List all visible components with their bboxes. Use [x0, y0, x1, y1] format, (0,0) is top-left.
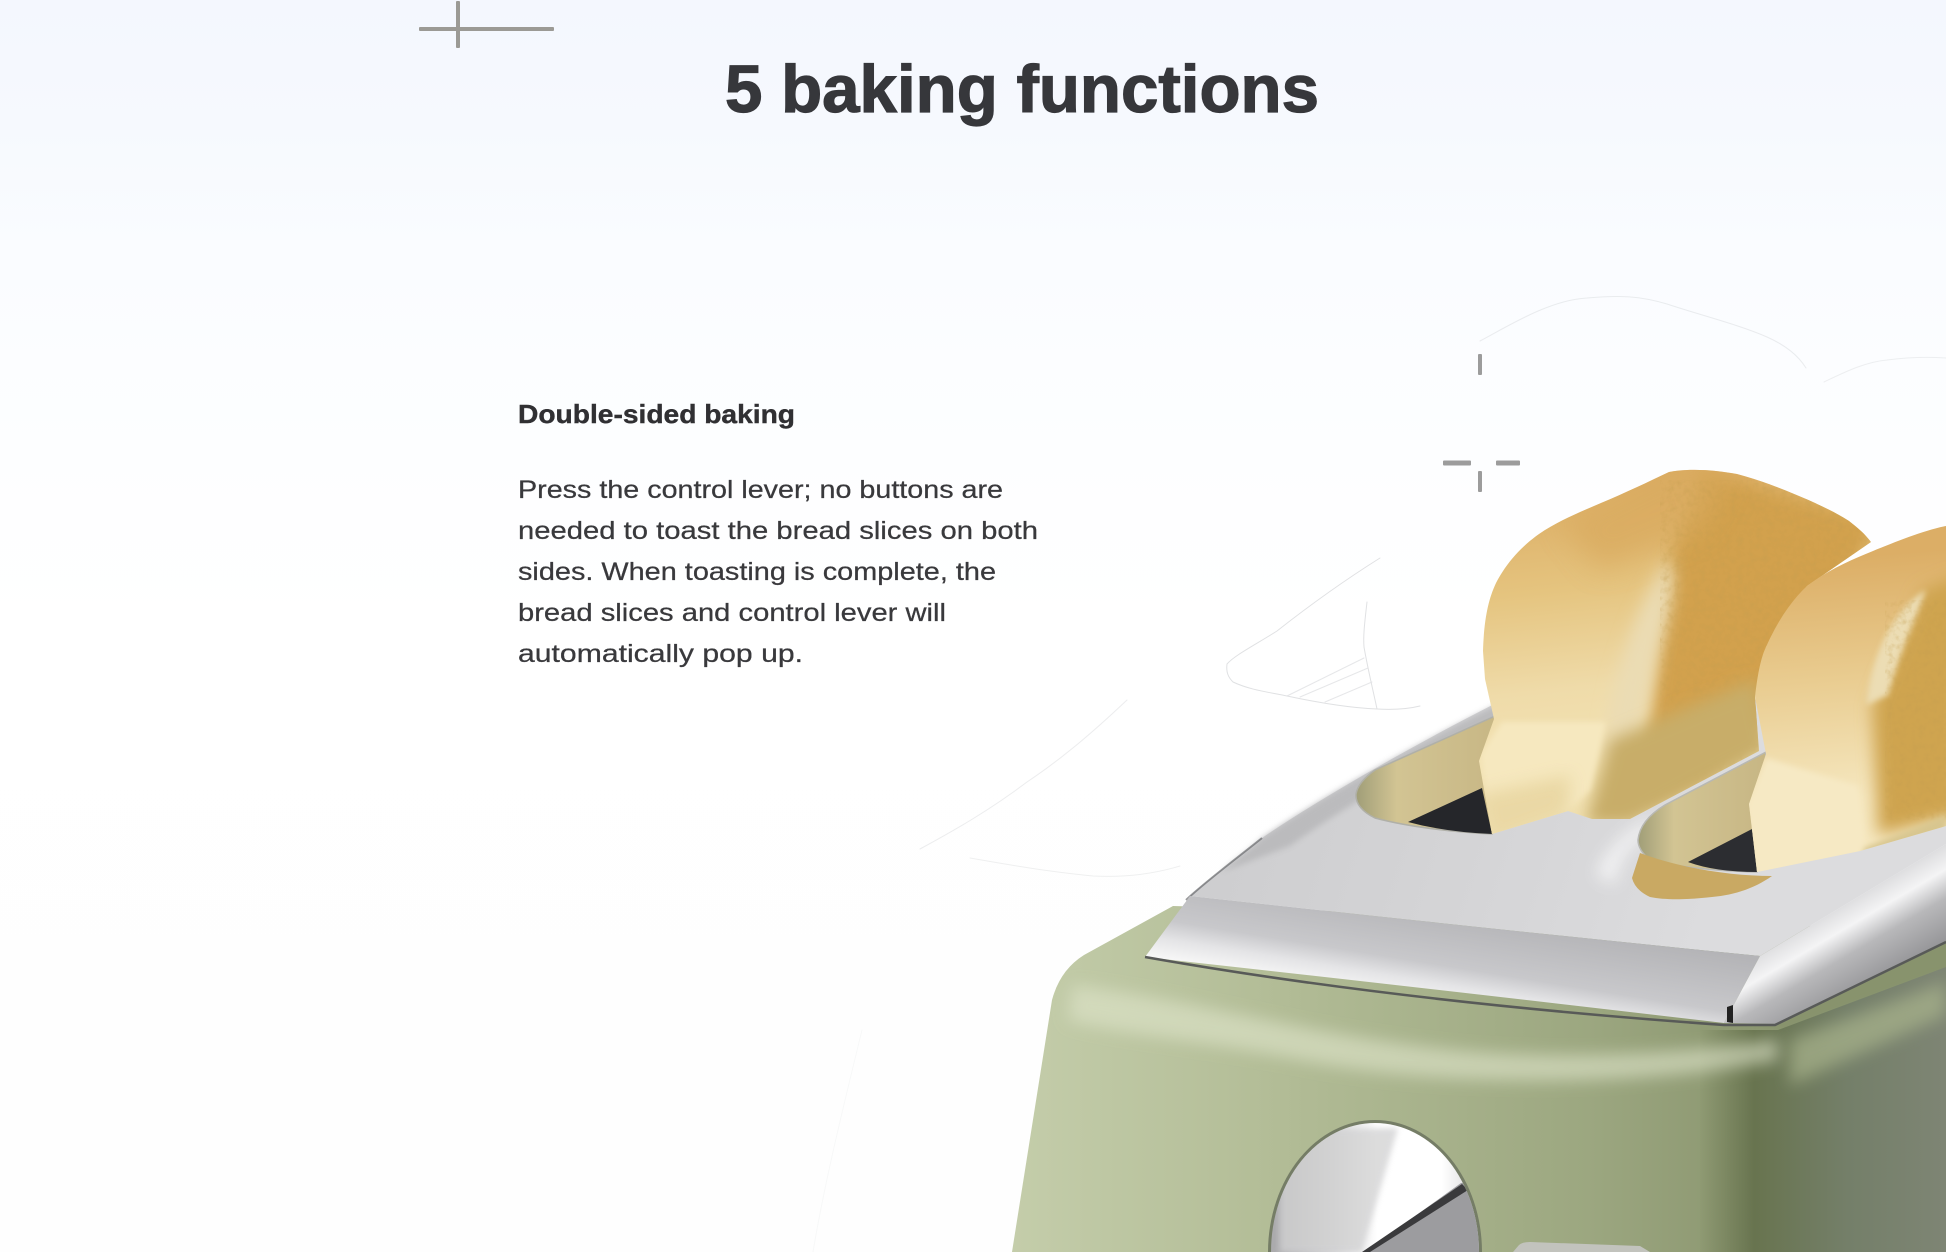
- feature description: bread slices and control lever will: [518, 599, 946, 627]
- lower face: [1585, 680, 1770, 825]
- plate front band: [1145, 896, 1760, 1023]
- rear bread slice: [1470, 460, 1880, 845]
- illustration: toaster with bread: [1012, 460, 1946, 1252]
- toasted face: [1872, 575, 1946, 835]
- title: 5 baking functions: [725, 52, 1319, 127]
- highlight between slots: [1596, 818, 1652, 885]
- front bread slice: [1745, 520, 1946, 880]
- crosshair mark: right: [1443, 354, 1520, 492]
- faint pencil sketch of hands: [813, 296, 1946, 1252]
- top crust blend: [1564, 470, 1719, 570]
- plate rear edge: [1222, 702, 1505, 872]
- gold reflection: [1632, 853, 1772, 899]
- lever knob: [1268, 1120, 1482, 1252]
- cream base: [1750, 758, 1853, 872]
- cream base: [1481, 722, 1606, 838]
- crumb texture: [1660, 490, 1786, 648]
- rear bread slot: [1356, 713, 1502, 834]
- pale streak: [1866, 590, 1925, 705]
- lower control button: [1513, 1242, 1650, 1252]
- toaster green body: [1012, 906, 1946, 1252]
- feature description: Press the control lever; no buttons are: [518, 476, 1003, 504]
- feature text block: [518, 399, 1038, 668]
- body right side: [1700, 967, 1946, 1252]
- crosshair mark: top left: [419, 1, 554, 48]
- moulded top highlight: [1068, 985, 1778, 1081]
- front bread slot: [1632, 752, 1772, 899]
- crumb texture: [1885, 600, 1946, 820]
- feature description: sides. When toasting is complete, the: [518, 558, 996, 586]
- feature description: [518, 476, 1038, 668]
- feature description: automatically pop up.: [518, 640, 803, 668]
- feature heading: Double-sided baking: [518, 399, 795, 429]
- plate right facet: [1724, 844, 1946, 1024]
- toasted face: [1640, 470, 1880, 800]
- chrome top plate: [1145, 700, 1946, 1025]
- lower crust: [1862, 814, 1946, 850]
- feature description: needed to toast the bread slices on both: [518, 517, 1038, 545]
- pale streak: [1619, 556, 1683, 722]
